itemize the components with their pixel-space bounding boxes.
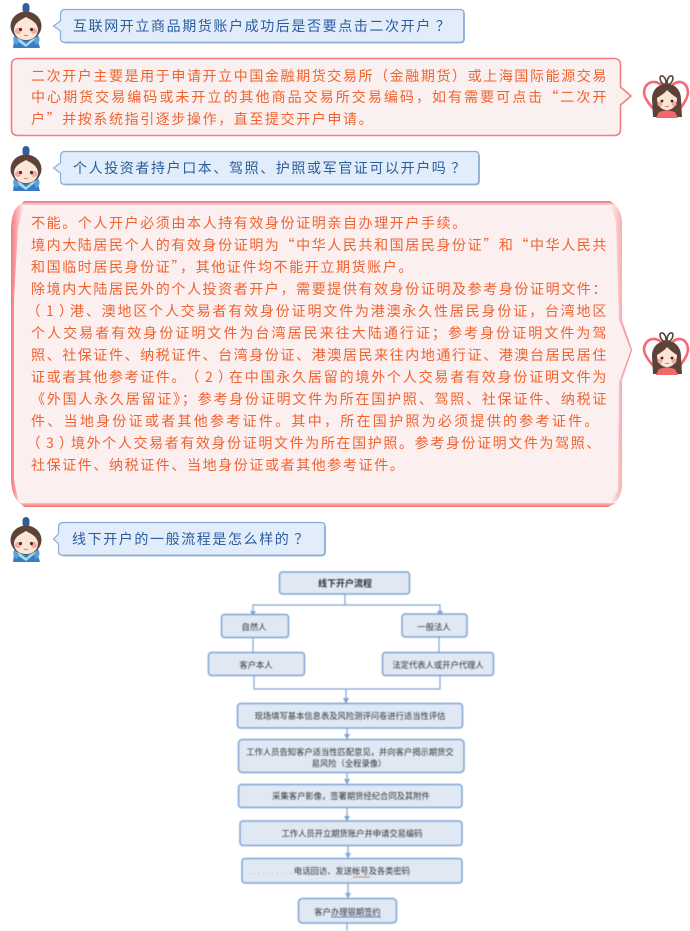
icon: boy avatar 1 — [10, 3, 42, 48]
question text 1: 互联网开立商品期货账户成功后是否要点击二次开户 ？ — [73, 16, 451, 36]
flow step: fill forms and assess — [238, 704, 462, 728]
flowchart: offline account opening — [208, 572, 494, 931]
flow step: title: 线下开户流程 — [318, 576, 372, 590]
answer text 2: 境内大陆居民个人的有效身份证明为“中华人民共和国居民身份证”和“中华人民共 — [31, 235, 608, 255]
answer text 2: 港、澳地区个人交易者有效身份证明文件为港澳永久性居民身份证，台湾地区 — [70, 301, 608, 321]
answer text 2: 件、当地身份证或者其他参考证件。其中，所在国护照为必须提供的参考证件。 — [31, 411, 600, 431]
answer text 2: 2 — [205, 367, 214, 387]
answer text 2: 3 — [46, 433, 55, 453]
flow step: natural person — [222, 614, 288, 638]
answer text 2 — [26, 213, 608, 475]
flow step: notify risk: 工作人员告知客户适当性匹配意见，并向客户揭示期货交 — [246, 746, 454, 758]
question bubble 1 — [54, 10, 464, 42]
flow step: open account: 工作人员开立期货账户并申请交易编码 — [281, 828, 423, 840]
flow step: collect images and sign: 采集客户影像，签署期货经纪合同及其附件 — [272, 790, 430, 802]
flow step: open account — [240, 821, 462, 846]
answer text 2: 不能。个人开户必须由本人持有效身份证明亲自办理开户手续。 — [31, 213, 468, 233]
flow step: collect images and sign — [238, 784, 462, 808]
flow step: phone callback: 电话回访、发送帐号及各类密码 — [294, 865, 410, 877]
answer text 1: 户”并按系统指引逐步操作，直至提交开户申请。 — [31, 109, 374, 129]
flow step: client in person — [208, 652, 304, 676]
answer text 2: （ — [26, 433, 42, 453]
flow step: bank-futures signing — [298, 898, 396, 923]
answer text 2: 社保证件、纳税证件、当地身份证或者其他参考证件。 — [31, 455, 405, 475]
answer text 1: 二次开户主要是用于申请开立中国金融期货交易所（金融期货）或上海国际能源交易 — [31, 66, 608, 86]
answer text 2: 《外国人永久居留证》；参考身份证明文件为所在国护照、驾照、社保证件、纳税证 — [31, 389, 608, 409]
answer text 2: ） — [59, 301, 75, 321]
flow step: bank-futures signing: 客户办理银期签约 — [314, 906, 381, 918]
answer text 2: （ — [186, 367, 201, 387]
flow step: title — [280, 572, 410, 594]
icon: boy avatar 3 — [10, 517, 42, 562]
flow step: natural person: 自然人 — [242, 621, 266, 633]
answer text 2: 照、社保证件、纳税证件、台湾身份证、港澳居民来往内地通行证、港澳台居民居住 — [31, 345, 608, 365]
question text 3: 线下开户的一般流程是怎么样的 ？ — [72, 529, 310, 549]
answer text 2: （ — [26, 301, 42, 321]
answer text 2: ） — [59, 433, 75, 453]
answer bubble 1 — [12, 58, 631, 136]
flow step: notify risk — [238, 740, 464, 772]
answer bubble 2 — [11, 201, 632, 507]
flow step: legal person: 一般法人 — [417, 621, 451, 633]
answer text 2: 境外个人交易者有效身份证明文件为所在国护照。参考身份证明文件为驾照、 — [71, 433, 602, 453]
flow step: legal representative or agent: 法定代表人或开户代理人 — [392, 659, 484, 671]
icon: girl avatar 2 — [644, 332, 688, 375]
answer text 1 — [31, 66, 608, 129]
flow step: phone callback — [242, 858, 462, 883]
question bubble 3 — [54, 522, 325, 556]
icon: boy avatar 2 — [10, 146, 42, 191]
answer text 2: 1 — [46, 301, 55, 321]
flow step: notify risk: 易风险（全程录像） — [312, 758, 386, 770]
answer text 1: 中心期货交易编码或未开立的其他商品交易所交易编码，如有需要可点击“二次开 — [31, 87, 608, 107]
flow step: legal person — [402, 614, 467, 637]
answer text 2: 证或者其他参考证件。 — [31, 367, 187, 387]
flow step: phone callback: .......... — [249, 867, 292, 876]
icon: girl avatar 1 — [644, 75, 688, 118]
flow step: client in person: 客户本人 — [239, 659, 273, 671]
answer text 2: ） — [218, 367, 234, 387]
answer text 2: 除境内大陆居民外的个人投资者开户，需要提供有效身份证明及参考身份证明文件： — [31, 279, 608, 299]
question bubble 2 — [54, 152, 479, 184]
answer text 2: 个人交易者有效身份证明文件为台湾居民来往大陆通行证；参考身份证明文件为驾 — [31, 323, 608, 343]
answer text 2: 和国临时居民身份证”，其他证件均不能开立期货账户。 — [31, 257, 414, 277]
question text 2: 个人投资者持户口本、驾照、护照或军官证可以开户吗 ？ — [73, 158, 467, 178]
flow step: fill forms and assess: 现场填写基本信息表及风险测评问卷进行适当性评估 — [255, 710, 445, 722]
answer text 2: 在中国永久居留的境外个人交易者有效身份证明文件为 — [229, 367, 608, 387]
flow step: legal representative or agent — [382, 652, 494, 676]
